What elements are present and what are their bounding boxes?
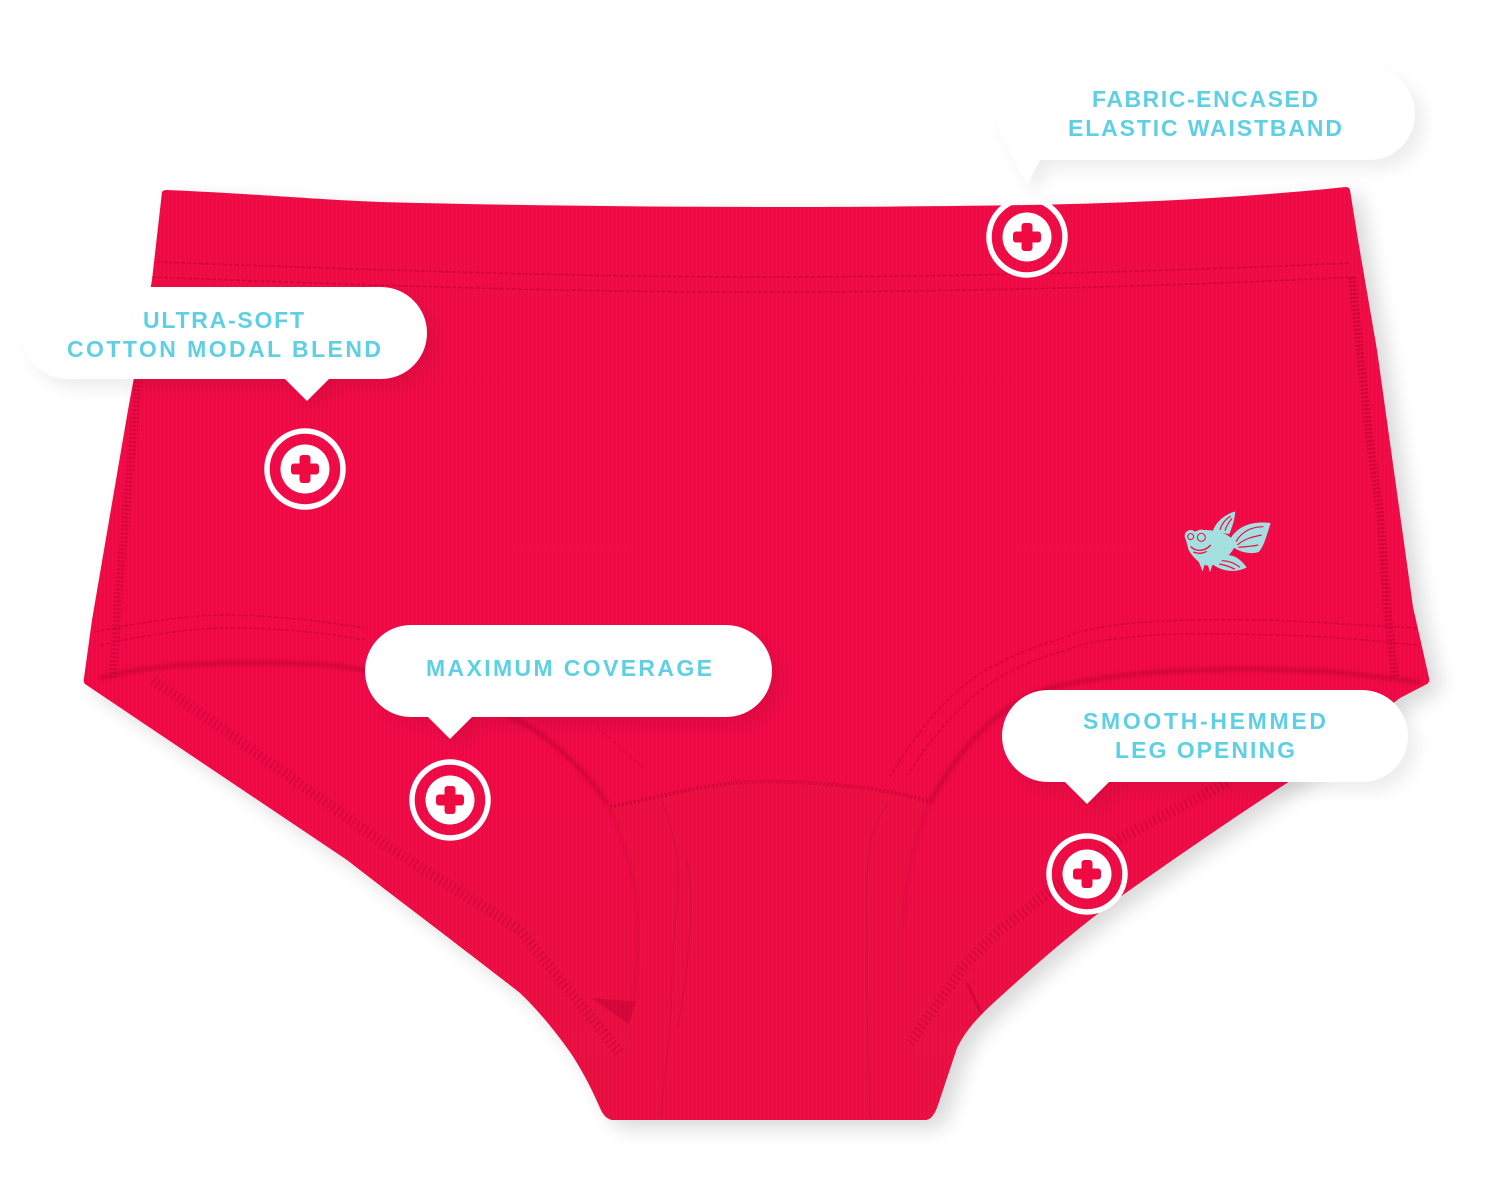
garment bbox=[80, 185, 1440, 1128]
icon: plus marker coverage bbox=[412, 762, 488, 838]
side seam left bbox=[109, 379, 142, 678]
icon: goldfish logo bbox=[1185, 511, 1271, 572]
icon: plus marker waistband bbox=[989, 199, 1065, 275]
right leg seam bbox=[910, 783, 1227, 1043]
left leg seam bbox=[153, 680, 620, 1053]
upper crotch stitching bbox=[597, 727, 643, 767]
callout: ultra-soft cotton modal blend bbox=[22, 287, 427, 401]
waistband stitching bbox=[152, 262, 1354, 292]
callout: smooth-hemmed leg opening bbox=[1002, 690, 1408, 804]
icon: plus marker fabric bbox=[267, 431, 343, 507]
callout: maximum coverage: MAXIMUM COVERAGE bbox=[426, 655, 712, 681]
hem stitching bbox=[95, 615, 1417, 777]
callout: ultra-soft cotton modal blend: ULTRA-SOFT bbox=[143, 307, 304, 333]
gusset panel bbox=[604, 1115, 932, 1120]
callout: maximum coverage bbox=[365, 625, 772, 739]
callout: fabric-encased elastic waistband: ELASTIC WAISTBAND bbox=[1068, 115, 1342, 141]
gusset inner stitching bbox=[660, 803, 887, 1117]
callout: smooth-hemmed leg opening: SMOOTH-HEMMED bbox=[1083, 708, 1326, 734]
callout: fabric-encased elastic waistband bbox=[995, 68, 1415, 185]
callout: fabric-encased elastic waistband: FABRIC-ENCASED bbox=[1092, 86, 1318, 112]
icon: plus marker leg opening bbox=[1049, 836, 1125, 912]
callout: smooth-hemmed leg opening: LEG OPENING bbox=[1115, 737, 1295, 763]
callout: ultra-soft cotton modal blend: COTTON MODAL BLEND bbox=[67, 336, 381, 362]
fabric texture bbox=[80, 185, 1435, 1125]
crotch notch and tack bbox=[597, 983, 982, 1022]
gusset side shading bbox=[634, 890, 906, 993]
side seam right bbox=[1352, 277, 1395, 677]
garment body bbox=[84, 187, 1429, 1120]
garment shadow bbox=[95, 195, 1440, 1128]
gusset stitching bbox=[610, 782, 930, 807]
leg opening inner shading bbox=[100, 663, 1420, 803]
